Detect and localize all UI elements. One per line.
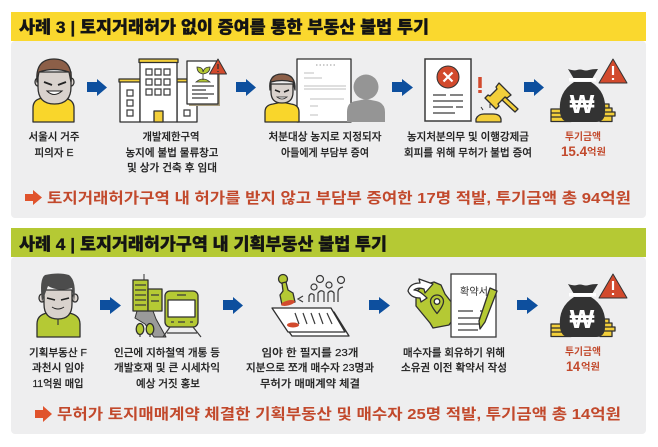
step captions: 11억원 매입 (32, 377, 84, 390)
investment amount: 14 (566, 358, 580, 374)
icon: suspect with son and document (265, 59, 385, 122)
step captions: 예상 거짓 홍보 (136, 377, 200, 390)
heading: case 4 (11, 228, 646, 257)
icon: stamp, buyers and land parcel (272, 274, 349, 336)
summary: 무허가 토지매매계약 체결한 기획부동산 및 매수자 25명 적발, 투기금액 총 14억원 (57, 406, 621, 423)
icon: city and train (133, 274, 201, 337)
icon: money bag: ₩ (570, 304, 595, 334)
step captions (28, 130, 532, 174)
arrow (369, 297, 390, 314)
icon: money bag: ₩ (570, 89, 595, 119)
step captions: 서울시 거주 (28, 131, 80, 143)
investment amount: 투기금액 (565, 345, 601, 358)
icon: rejected document and gavel (425, 59, 518, 122)
step captions: 기획부동산 F (29, 346, 87, 359)
icon: broker F (37, 274, 80, 337)
panel: case 4 (11, 228, 646, 434)
arrow (223, 297, 243, 314)
step captions: 인근에 지하철역 개통 등 (114, 346, 220, 359)
step captions: 지분으로 쪼개 매수자 23명과 (246, 361, 374, 374)
step captions: 소유권 이전 확약서 작성 (401, 361, 507, 374)
investment amount: 억원 (587, 146, 606, 158)
step captions: 과천시 임야 (32, 361, 84, 374)
arrow (100, 297, 121, 314)
step captions: 아들에게 부담부 증여 (281, 146, 369, 159)
icon: map and pledge document: 확약서 (460, 286, 488, 298)
heading: case 3: 사례 3 | 토지거래허가 없이 증여를 통한 부동산 불법 투기 (19, 18, 429, 37)
arrow (392, 79, 413, 96)
arrow (517, 297, 538, 314)
investment amount: 억원 (581, 361, 600, 373)
step captions: 처분대상 농지로 지정되자 (268, 130, 382, 143)
arrow (236, 79, 256, 96)
step captions: 개발제한구역 (142, 130, 200, 143)
icon: money bag (551, 274, 627, 337)
panel: case 3 (11, 12, 646, 218)
arrow (87, 79, 107, 96)
step captions: 매수자를 회유하기 위해 (403, 346, 505, 359)
step captions: 농지에 불법 물류창고 (126, 146, 219, 159)
step captions (29, 346, 507, 390)
investment amount (565, 345, 601, 374)
step captions: 피의자 E (34, 147, 74, 159)
step captions: 및 상가 건축 후 임대 (127, 161, 217, 174)
icon: buildings and farmland document (119, 59, 226, 122)
investment amount: 투기금액 (565, 130, 601, 143)
arrow (524, 79, 544, 96)
step captions: 임야 한 필지를 23개 (262, 346, 358, 359)
icon: map and pledge document (408, 274, 497, 337)
step captions: 농지처분의무 및 이행강제금 (407, 131, 529, 143)
icon: suspect E (33, 59, 74, 122)
heading: case 4: 사례 4 | 토지거래허가구역 내 기획부동산 불법 투기 (19, 235, 387, 254)
investment amount: 15.4 (561, 143, 587, 159)
heading: case 3 (11, 12, 646, 41)
investment amount (561, 130, 606, 159)
step captions: 회피를 위해 무허가 불법 증여 (404, 146, 532, 159)
summary: 토지거래허가구역 내 허가를 받지 않고 부담부 증여한 17명 적발, 투기금액 총 94억원 (47, 190, 631, 207)
step captions: 개발호재 및 큰 시세차익 (114, 361, 220, 374)
icon: money bag (551, 59, 627, 122)
step captions: 무허가 매매계약 체결 (260, 377, 360, 390)
